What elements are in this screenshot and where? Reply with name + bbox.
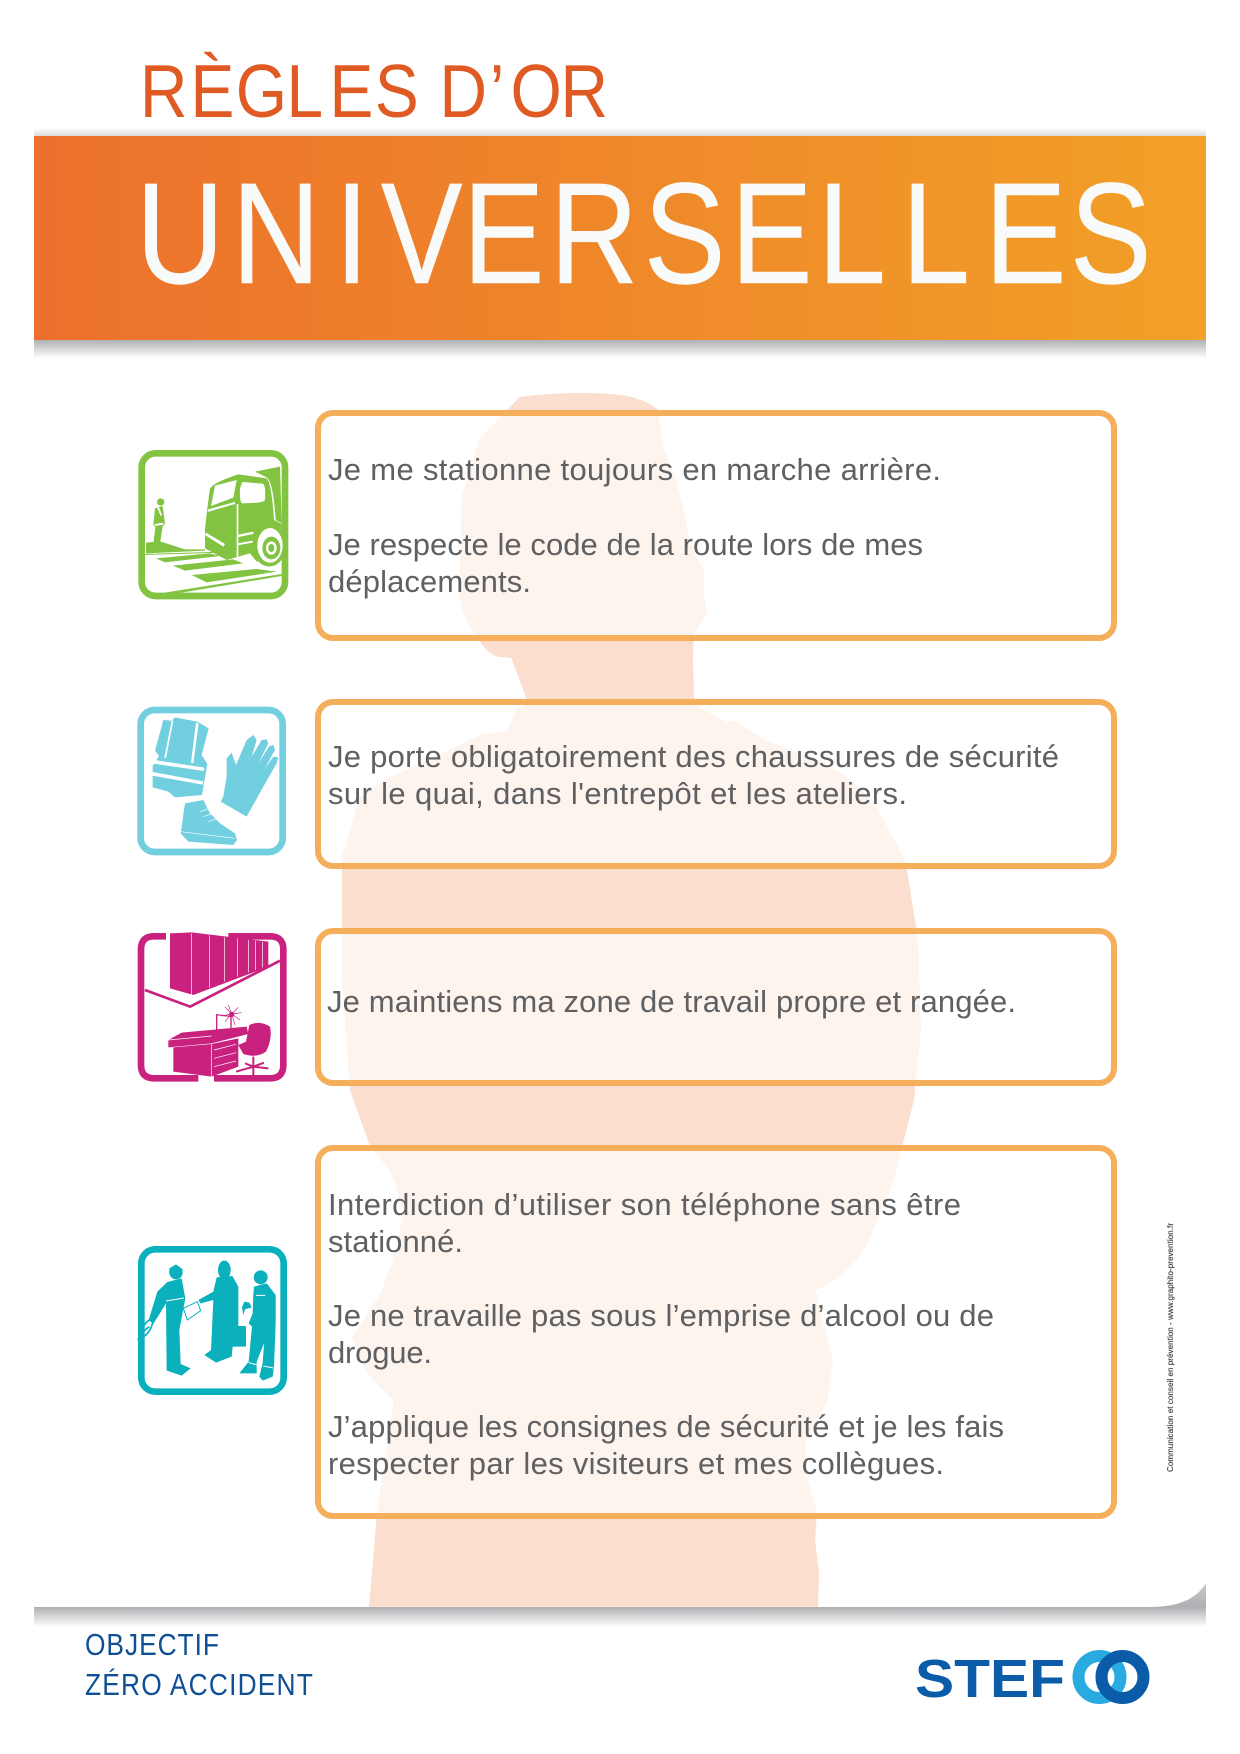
- rule 1 text: déplacements.: [328, 564, 531, 599]
- logo: stef: [915, 1649, 1144, 1709]
- vertical credit text: Communication et conseil en prévention - www.graphito-prevention.fr: [1166, 1223, 1175, 1472]
- silhouette: [343, 394, 920, 1607]
- rule 4 text: drogue.: [328, 1335, 432, 1370]
- icon: workers talking: [138, 1249, 284, 1392]
- rule 4 text: respecter par les visiteurs et mes collègues.: [328, 1446, 944, 1481]
- slogan: ZÉRO ACCIDENT: [85, 1667, 313, 1703]
- rule 1 text: Je respecte le code de la route lors de mes: [328, 527, 923, 562]
- title: règles d'or: RÈGLES D’OR: [140, 49, 608, 133]
- logo rings: [1078, 1656, 1144, 1698]
- rule 1 text: [328, 452, 941, 599]
- rule 2 text: sur le quai, dans l'entrepôt et les ateliers.: [328, 776, 907, 811]
- rule 4 text: Je ne travaille pas sous l’emprise d’alcool ou de: [328, 1298, 994, 1333]
- header band shadow: [34, 128, 1206, 358]
- slogan: [85, 1628, 313, 1703]
- icon: protective gear: [141, 710, 283, 852]
- rule 3 text: Je maintiens ma zone de travail propre et rangée.: [327, 984, 1016, 1019]
- heading: universelles: UNIVERSELLES: [136, 154, 1152, 314]
- rule 4 text: Interdiction d’utiliser son téléphone sans être: [328, 1187, 961, 1222]
- rule 4 text: J’applique les consignes de sécurité et je les fais: [328, 1409, 1004, 1444]
- panel: rule 1: [318, 413, 1114, 638]
- icon: truck and pedestrian: [142, 453, 286, 596]
- panel: rule 2: [318, 702, 1114, 866]
- logo: stef: STEF: [915, 1649, 1065, 1709]
- footer shadow band: [34, 1583, 1206, 1627]
- rule 4 text: stationné.: [328, 1224, 463, 1259]
- slogan: OBJECTIF: [85, 1628, 219, 1663]
- icon: tidy workspace: [141, 932, 283, 1078]
- rule 4 text: [328, 1187, 1004, 1481]
- rule 2 text: Je porte obligatoirement des chaussures de sécurité: [328, 739, 1059, 774]
- rule 1 text: Je me stationne toujours en marche arrière.: [328, 452, 941, 487]
- rule 2 text: [328, 739, 1059, 811]
- panel: rule 4: [318, 1148, 1114, 1516]
- orange banner: [34, 136, 1206, 340]
- panel: rule 3: [318, 931, 1114, 1083]
